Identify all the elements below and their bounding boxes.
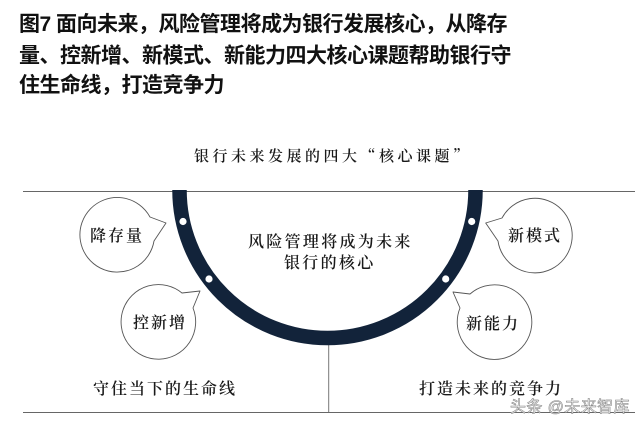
watermark: 头条 @未来智库: [510, 398, 630, 416]
title: 图7 面向未来，风险管理将成为银行发展核心，从降存: [19, 12, 508, 36]
bubble: control new additions: 控新增: [133, 310, 187, 333]
bubble: control new additions: [121, 285, 200, 359]
bubble: new capabilities: [453, 285, 532, 359]
right caption: 打造未来的竞争力: [419, 376, 563, 399]
left caption: 守住当下的生命线: [93, 376, 237, 399]
bubble: new models: [486, 198, 572, 273]
title: 住生命线，打造竞争力: [19, 73, 224, 97]
bottom rule: [23, 412, 635, 414]
centre statement: 风险管理将成为未来: [248, 229, 413, 252]
bubble: reduce existing stock: 降存量: [90, 223, 144, 246]
title: [19, 12, 511, 97]
bubble: new models: 新模式: [508, 223, 562, 246]
top rule: [23, 190, 635, 192]
bubble: reduce existing stock: [80, 197, 166, 272]
semicircular ring: [179, 190, 476, 338]
centre statement: [248, 229, 413, 273]
divider between lower columns: [328, 345, 330, 412]
bubble: new capabilities: 新能力: [466, 311, 520, 334]
title: 量、控新增、新模式、新能力四大核心课题帮助银行守: [19, 44, 511, 68]
subtitle: 银行未来发展的四大“核心课题”: [194, 145, 472, 166]
centre statement: 银行的核心: [284, 250, 376, 273]
